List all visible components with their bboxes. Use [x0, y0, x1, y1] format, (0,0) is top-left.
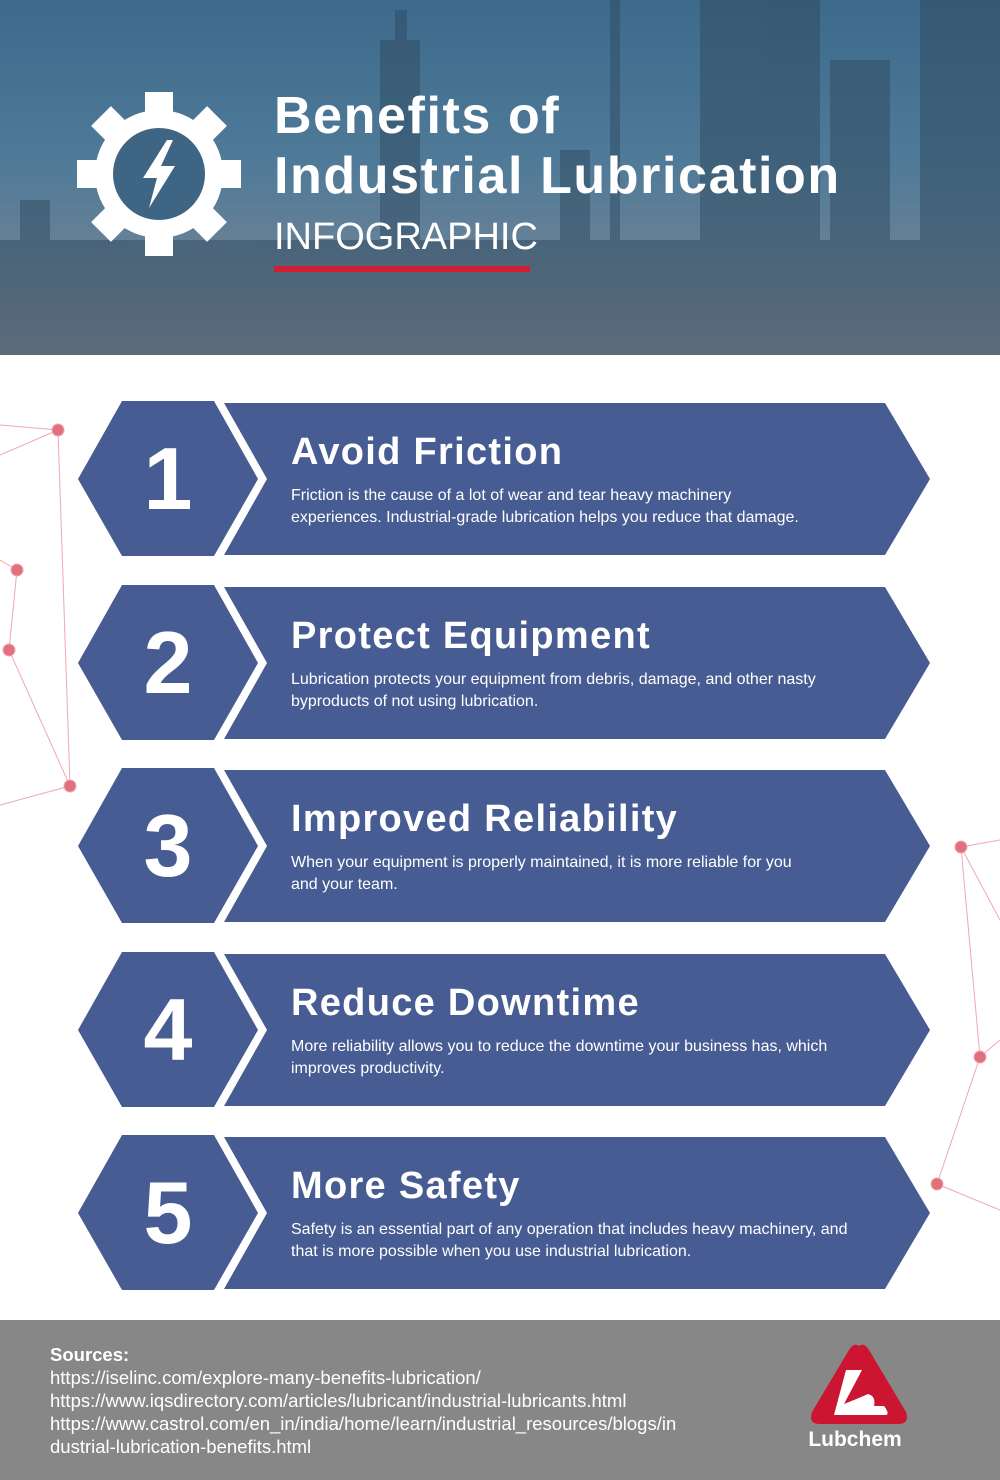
item 5: Safety is an essential part of any operation that includes heavy machinery, and that is more possible when you use industrial lubrication. — [291, 1221, 847, 1260]
sources text: https://www.castrol.com/en_in/india/home/learn/industrial_resources/blogs/in — [50, 1413, 676, 1434]
item 4: 4 — [144, 980, 192, 1079]
title: Benefits of — [274, 87, 560, 145]
item 5: 5 — [144, 1163, 192, 1262]
item 1: Friction is the cause of a lot of wear and tear heavy machinery — [291, 487, 731, 504]
title: Industrial Lubrication — [274, 147, 841, 205]
logo: Lubchem: Lubchem — [808, 1428, 902, 1451]
item 1: experiences. Industrial-grade lubrication helps you reduce that damage. — [291, 508, 799, 526]
icon: gear with lightning — [77, 92, 241, 256]
item 3: When your equipment is properly maintained, it is more reliable for you and your team. — [291, 854, 792, 892]
item 2: 2 — [144, 613, 192, 712]
item 1: 1 — [144, 429, 192, 528]
item 5 — [78, 1135, 930, 1290]
item 4: Reduce Downtime — [291, 982, 640, 1024]
header: refinery photo banner — [0, 0, 1000, 355]
item 2 — [78, 585, 930, 740]
sources text — [50, 1344, 676, 1457]
logo: Lubchem — [808, 1344, 907, 1451]
footer — [0, 1320, 1000, 1480]
item 4 — [78, 952, 930, 1107]
sources text: https://iselinc.com/explore-many-benefits-lubrication/ — [50, 1367, 481, 1388]
title: INFOGRAPHIC — [274, 216, 538, 258]
item 1: Avoid Friction — [291, 431, 563, 473]
sources text: https://www.iqsdirectory.com/articles/lubricant/industrial-lubricants.html — [50, 1390, 626, 1411]
item 2: Protect Equipment — [291, 615, 651, 657]
item 5: More Safety — [291, 1165, 521, 1207]
item 3 — [78, 768, 930, 923]
item 1 — [78, 401, 930, 556]
sources text: Sources: — [50, 1344, 129, 1365]
item 3: Improved Reliability — [291, 798, 678, 840]
item 3: 3 — [144, 796, 192, 895]
title — [274, 87, 841, 272]
item 4: More reliability allows you to reduce the downtime your business has, which improves productivity. — [291, 1038, 827, 1076]
sources text: dustrial-lubrication-benefits.html — [50, 1436, 311, 1457]
item 2: Lubrication protects your equipment from debris, damage, and other nasty byproducts of not using lubrication. — [291, 671, 816, 710]
